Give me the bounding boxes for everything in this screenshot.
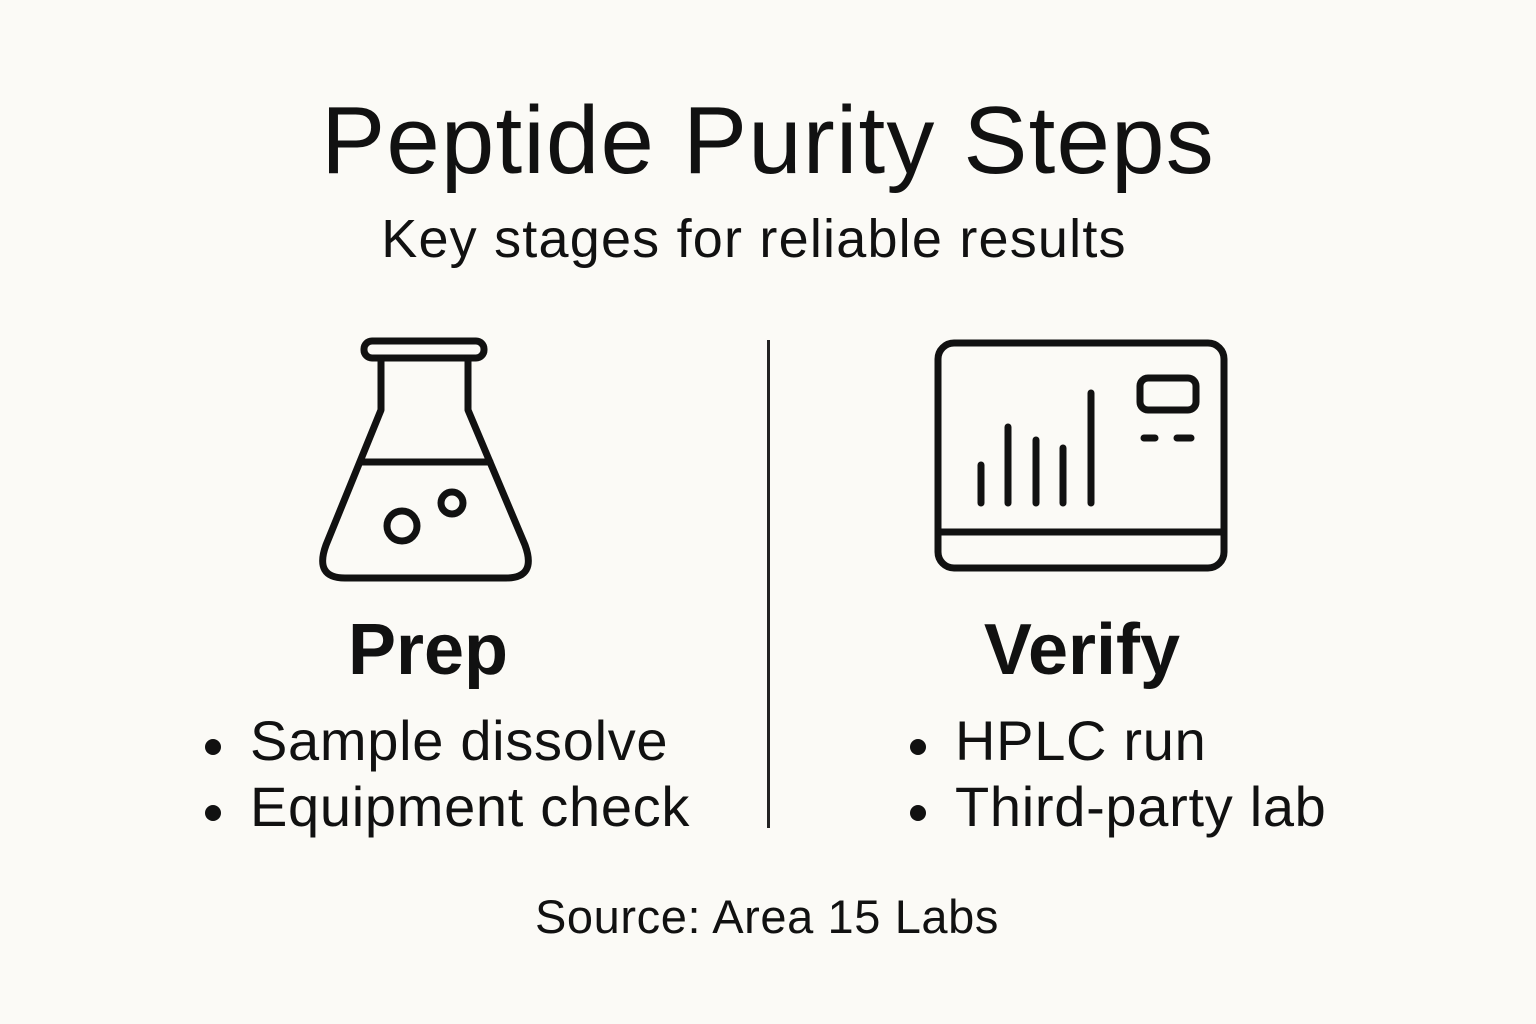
source: Source: Area 15 Labs: [535, 890, 999, 943]
heading: Prep: Prep: [348, 610, 508, 690]
list: verify bullets: [910, 709, 1327, 838]
list: verify bullets: Third-party lab: [955, 775, 1327, 838]
heading: Verify: Verify: [984, 610, 1180, 690]
divider: [767, 340, 770, 828]
icon: flask: [319, 338, 532, 582]
list: prep bullets: [205, 709, 690, 838]
subtitle: Key stages for reliable results: [381, 209, 1127, 269]
list: verify bullets: HPLC run: [955, 709, 1206, 772]
title: Peptide Purity Steps: [321, 87, 1215, 194]
list: prep bullets: Sample dissolve: [250, 709, 668, 772]
icon: monitor with chart: [934, 340, 1228, 572]
list: prep bullets: Equipment check: [250, 775, 690, 838]
